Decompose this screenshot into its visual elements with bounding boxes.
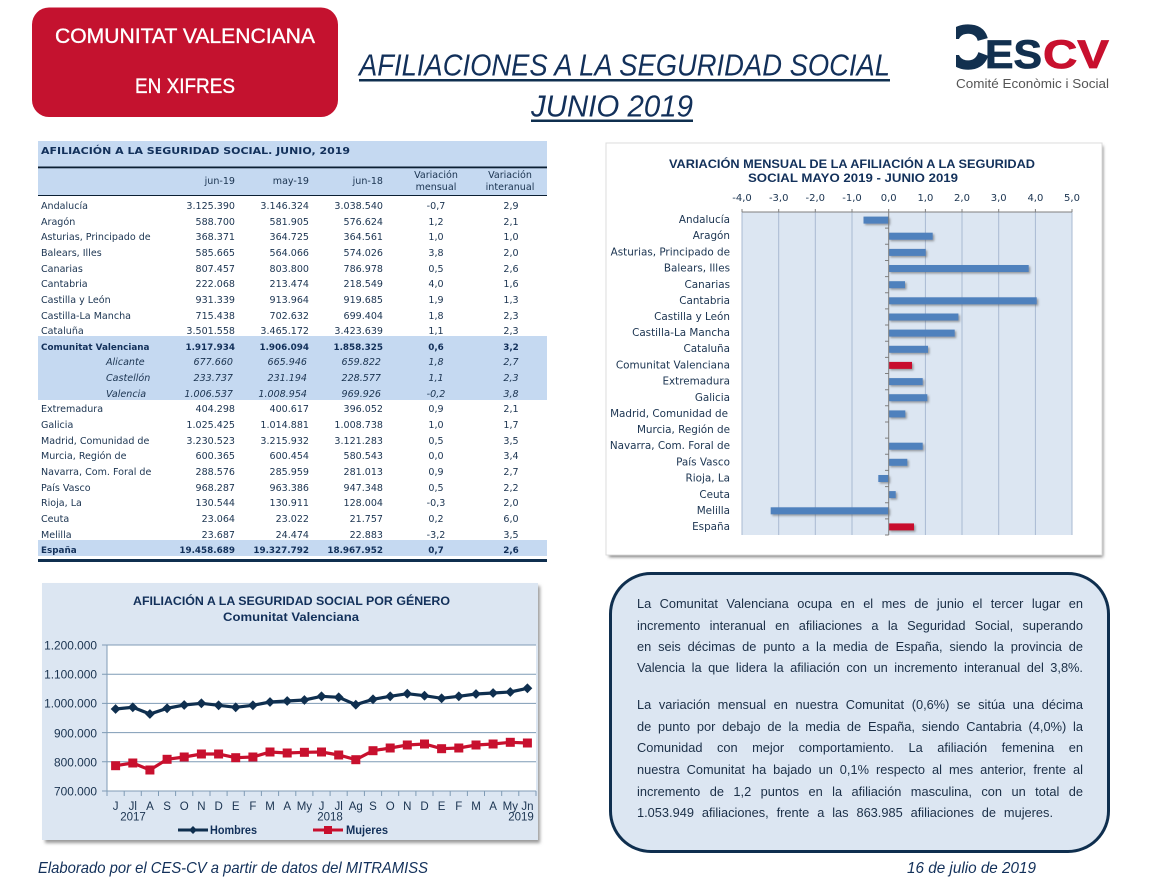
table rows: comunidades: 364.725 xyxy=(270,232,309,243)
line chart y axis values: 700.000 xyxy=(54,784,97,798)
line chart x axis labels: F xyxy=(249,801,256,813)
table rows: comunidades: 564.066 xyxy=(270,248,309,259)
line chart x axis labels: N xyxy=(197,801,206,813)
line chart x axis labels: A xyxy=(146,801,154,813)
table rows: comunidades: 1,3 xyxy=(503,295,519,306)
line chart x axis labels: My xyxy=(297,801,312,813)
table rows: comunidades: 1,0 xyxy=(503,232,519,243)
line chart x axis labels: N xyxy=(403,801,411,813)
table rows: comunidades: 574.026 xyxy=(344,248,383,259)
table rows: comunidades: Andalucía xyxy=(41,201,88,212)
table rows: comunidades: 3,8 xyxy=(428,248,444,259)
bar chart axis values: -4,0 xyxy=(732,193,752,204)
table rows: resto de comunidades: 22.883 xyxy=(350,530,383,541)
bar chart axis values: 0,0 xyxy=(881,193,897,204)
table row: Comunitat Valenciana: 1.858.325 xyxy=(333,343,383,353)
table rows: comunidades: 581.905 xyxy=(270,217,309,228)
table rows: provincias: 677.660 xyxy=(194,357,233,368)
table rows: resto de comunidades: 24.474 xyxy=(276,530,309,541)
table column headers: Variación xyxy=(488,170,532,181)
bar chart axis values: 1,0 xyxy=(917,193,933,204)
red header box: EN XIFRES xyxy=(135,75,235,98)
table rows: comunidades: 699.404 xyxy=(344,311,383,322)
table rows: comunidades: 585.665 xyxy=(196,248,235,259)
table rows: resto de comunidades: 963.386 xyxy=(270,483,309,494)
table row: España: 18.967.952 xyxy=(327,546,383,556)
table rows: comunidades: 0,5 xyxy=(428,264,444,275)
panel: bar chart variación mensual xyxy=(606,143,1103,557)
table rows: comunidades: 2,9 xyxy=(503,201,519,212)
table rows: comunidades: 222.068 xyxy=(196,279,235,290)
table rows: comunidades: Canarias xyxy=(41,264,83,275)
table rows: comunidades: 218.549 xyxy=(344,279,383,290)
line chart title: AFILIACIÓN A LA SEGURIDAD SOCIAL POR GÉNERO xyxy=(133,595,450,608)
table rows: resto de comunidades: 130.911 xyxy=(270,498,309,509)
table rows: resto de comunidades: 3.215.932 xyxy=(260,436,309,447)
table rows: comunidades: 913.964 xyxy=(270,295,309,306)
table rows: resto de comunidades: 3,5 xyxy=(503,436,519,447)
bar chart category labels: Melilla xyxy=(697,505,730,517)
table column headers: interanual xyxy=(486,182,534,193)
table rows: resto de comunidades: 6,0 xyxy=(503,514,519,525)
line chart y axis values: 800.000 xyxy=(54,756,97,770)
bar chart category labels: Castilla-La Mancha xyxy=(632,327,730,339)
main title: JUNIO 2019 xyxy=(530,88,693,124)
line chart y axis values: 1.000.000 xyxy=(44,696,97,710)
table rows: resto de comunidades xyxy=(41,404,519,541)
table rows: comunidades xyxy=(41,201,519,337)
table rows: comunidades: -0,7 xyxy=(427,201,445,212)
main title: AFILIACIONES A LA SEGURIDAD SOCIAL xyxy=(357,48,890,82)
line chart x axis labels: O xyxy=(180,801,189,813)
table rows: resto de comunidades: 396.052 xyxy=(344,404,383,415)
table rows: comunidades: Castilla-La Mancha xyxy=(41,311,131,322)
table rows: comunidades: 803.800 xyxy=(270,264,309,275)
table row: España: 19.327.792 xyxy=(253,546,309,556)
line chart title: Comunitat Valenciana xyxy=(223,612,360,624)
bar chart category labels: Aragón xyxy=(693,230,730,242)
table rows: comunidades: 3.146.324 xyxy=(260,201,309,212)
table rows: provincias: 2,3 xyxy=(503,373,519,384)
table rows: comunidades: 1,0 xyxy=(428,232,444,243)
table rows: comunidades: 786.978 xyxy=(344,264,383,275)
bar chart category labels: Comunitat Valenciana xyxy=(616,360,730,372)
table rows: comunidades: 715.438 xyxy=(196,311,235,322)
text panel: comentario: 1.053.949 afiliaciones, frente a las 863.985 afiliaciones de mujeres. xyxy=(637,805,1053,820)
line chart x axis labels: Jl xyxy=(335,801,343,813)
table rows: comunidades: 3.038.540 xyxy=(334,201,383,212)
table rows: comunidades: 1,1 xyxy=(428,326,444,337)
table rows: comunidades: Cantabria xyxy=(41,279,88,290)
bar chart axis values xyxy=(732,193,1080,204)
table rows: resto de comunidades: 3,5 xyxy=(503,530,519,541)
table rows: comunidades: 3.465.172 xyxy=(260,326,309,337)
table rows: comunidades: Balears, Illes xyxy=(41,248,102,259)
bar chart axis values: 4,0 xyxy=(1027,193,1043,204)
table rows: comunidades: Cataluña xyxy=(41,326,84,337)
bar chart title xyxy=(669,158,1035,185)
bar chart category labels: España xyxy=(692,521,730,533)
table: afiliación por comunidades xyxy=(38,141,547,562)
table rows: resto de comunidades: País Vasco xyxy=(41,483,91,494)
red header box xyxy=(32,8,338,117)
table rows: provincias: Castellón xyxy=(106,373,150,384)
table rows: resto de comunidades: 3,4 xyxy=(503,451,519,462)
main title xyxy=(357,48,890,124)
table rows: resto de comunidades: -3,2 xyxy=(427,530,445,541)
line chart x axis labels: Jn xyxy=(521,801,533,813)
table rows: comunidades: 588.700 xyxy=(196,217,235,228)
table rows: resto de comunidades: 23.064 xyxy=(202,514,235,525)
bar chart axis values: 3,0 xyxy=(991,193,1007,204)
table rows: resto de comunidades: 128.004 xyxy=(344,498,383,509)
table rows: comunidades: 2,3 xyxy=(503,326,519,337)
table rows: resto de comunidades: 0,9 xyxy=(428,404,444,415)
table rows: resto de comunidades: Rioja, La xyxy=(41,498,82,509)
table rows: resto de comunidades: 600.365 xyxy=(196,451,235,462)
table rows: resto de comunidades: Murcia, Región de xyxy=(41,451,127,462)
table rows: comunidades: 1,9 xyxy=(428,295,444,306)
table rows: provincias xyxy=(105,357,519,400)
line chart x axis labels: S xyxy=(369,801,377,813)
bar chart category labels: Extremadura xyxy=(662,376,730,388)
legend: Hombres xyxy=(178,825,257,837)
logo CES-CV: C xyxy=(945,14,988,81)
table rows: comunidades: 2,0 xyxy=(503,248,519,259)
line chart y axis values: 1.100.000 xyxy=(44,668,97,682)
table column headers: may-19 xyxy=(273,176,309,187)
table rows: resto de comunidades: Ceuta xyxy=(41,514,69,525)
bar chart category labels: Navarra, Com. Foral de xyxy=(610,440,730,452)
bars: Comunitat Valenciana y España xyxy=(889,362,914,530)
table rows: comunidades: 702.632 xyxy=(270,311,309,322)
table column headers: mensual xyxy=(416,182,456,193)
bar chart category labels xyxy=(610,214,730,533)
table rows: comunidades: 1,8 xyxy=(428,311,444,322)
table rows: resto de comunidades: 1.014.881 xyxy=(260,420,309,431)
line chart x axis labels: 2018 xyxy=(317,812,343,824)
table rows: resto de comunidades: 600.454 xyxy=(270,451,309,462)
table rows: resto de comunidades: 23.687 xyxy=(202,530,235,541)
table rows: comunidades: 807.457 xyxy=(196,264,235,275)
bar chart axis values: 2,0 xyxy=(954,193,970,204)
bars: comunidades xyxy=(771,217,1037,514)
footer date: 16 de julio de 2019 xyxy=(907,860,1036,877)
panel: line chart afiliación por género xyxy=(42,583,540,843)
bar chart plot area xyxy=(742,209,1072,535)
bar chart category labels: Canarias xyxy=(684,279,730,291)
table rows: comunidades: 3.125.390 xyxy=(186,201,235,212)
logo CES-CV: ES xyxy=(985,33,1042,77)
table column headers xyxy=(204,170,534,193)
line chart plot area xyxy=(102,645,536,796)
line chart x axis labels xyxy=(113,801,534,824)
logo CES-CV: Comité Econòmic i Social xyxy=(956,76,1109,91)
bar chart category labels: Cataluña xyxy=(684,343,730,355)
table rows: comunidades: 3.423.639 xyxy=(334,326,383,337)
bar chart title: SOCIAL MAYO 2019 - JUNIO 2019 xyxy=(748,173,958,185)
line chart x axis labels: O xyxy=(386,801,395,813)
table rows: resto de comunidades: 0,5 xyxy=(428,483,444,494)
line chart y axis values xyxy=(44,638,97,798)
table rows: resto de comunidades: 400.617 xyxy=(270,404,309,415)
line chart x axis labels: J xyxy=(319,801,324,813)
table row: Comunitat Valenciana xyxy=(41,343,519,353)
table rows: resto de comunidades: 21.757 xyxy=(350,514,383,525)
table rows: comunidades: Aragón xyxy=(41,217,75,228)
table rows: resto de comunidades: Madrid, Comunidad de xyxy=(41,436,149,447)
bar chart category labels: Cantabria xyxy=(679,295,730,307)
table rows: comunidades: 213.474 xyxy=(270,279,309,290)
table rows: resto de comunidades: 3.121.283 xyxy=(334,436,383,447)
line chart x axis labels: F xyxy=(455,801,462,813)
line chart x axis labels: E xyxy=(232,801,240,813)
table row: España: España xyxy=(41,546,77,556)
table rows: provincias: 2,7 xyxy=(503,357,519,368)
table rows: resto de comunidades: Extremadura xyxy=(41,404,103,415)
text panel: comentario: incremento interanual en afiliaciones a la Seguridad Social, superando xyxy=(637,618,1083,633)
line chart y axis values: 1.200.000 xyxy=(44,638,97,652)
table rows: comunidades: 368.371 xyxy=(196,232,235,243)
line chart y axis values: 900.000 xyxy=(54,726,97,740)
line chart x axis labels: Ag xyxy=(349,801,363,813)
table rows: provincias: Alicante xyxy=(105,357,145,368)
bar chart category labels: Ceuta xyxy=(699,489,730,501)
table rows: resto de comunidades: Galicia xyxy=(41,420,73,431)
table row: España: 19.458.689 xyxy=(179,546,235,556)
table rows: provincias: 659.822 xyxy=(342,357,381,368)
line chart x axis labels: M xyxy=(265,801,275,813)
table rows: comunidades: 1,6 xyxy=(503,279,519,290)
table rows: comunidades: 2,6 xyxy=(503,264,519,275)
text panel: comentario: Comunidad con mejor comportamiento. La afiliación femenina en xyxy=(637,740,1083,755)
line: Hombres xyxy=(116,688,527,714)
text panel: comentario: La variación mensual en nuestra Comunitat (0,6%) se sitúa una décima xyxy=(637,697,1083,712)
table rows: resto de comunidades: 0,0 xyxy=(428,451,444,462)
table rows: resto de comunidades: 285.959 xyxy=(270,467,309,478)
bar chart category labels: Galicia xyxy=(695,392,730,404)
table rows: comunidades: 2,1 xyxy=(503,217,519,228)
table rows: comunidades: 1,2 xyxy=(428,217,444,228)
table rows: provincias: 1.008.954 xyxy=(258,389,307,400)
line chart x axis labels: J xyxy=(113,801,118,813)
table rows: resto de comunidades: 23.022 xyxy=(276,514,309,525)
table rows: resto de comunidades: Navarra, Com. Foral de xyxy=(41,467,151,478)
text panel: comentario: Valencia la que lidera la afiliación con un incremento interanual del 3,8%. xyxy=(637,660,1083,675)
bar chart axis values: 5,0 xyxy=(1064,193,1080,204)
line chart x axis labels: S xyxy=(163,801,171,813)
bar chart category labels: Asturias, Principado de xyxy=(611,246,730,258)
table rows: comunidades: 4,0 xyxy=(428,279,444,290)
bar chart category labels: País Vasco xyxy=(676,456,730,468)
bar chart category labels: Madrid, Comunidad de xyxy=(610,408,728,420)
table rows: resto de comunidades: 1.025.425 xyxy=(186,420,235,431)
line chart x axis labels: D xyxy=(420,801,429,813)
table rows: provincias: 1,8 xyxy=(428,357,444,368)
bar chart category labels: Murcia, Región de xyxy=(637,424,730,436)
table rows: resto de comunidades: 1,0 xyxy=(428,420,444,431)
table rows: provincias: 1,1 xyxy=(428,373,444,384)
table rows: provincias: 1.006.537 xyxy=(184,389,233,400)
legend: Mujeres xyxy=(313,825,388,837)
table rows: comunidades: Asturias, Principado de xyxy=(41,232,151,243)
table rows: provincias: Valencia xyxy=(106,389,146,400)
table rows: resto de comunidades: 1.008.738 xyxy=(334,420,383,431)
line: Mujeres xyxy=(116,742,527,770)
bar chart axis values: -3,0 xyxy=(769,193,788,204)
bar chart axis values: -1,0 xyxy=(842,193,862,204)
line chart x axis labels: My xyxy=(503,801,518,813)
table rows: resto de comunidades: 2,1 xyxy=(503,404,519,415)
table rows: comunidades: Castilla y León xyxy=(41,295,111,306)
bar chart title: VARIACIÓN MENSUAL DE LA AFILIACIÓN A LA SEGURIDAD xyxy=(669,158,1035,171)
table rows: provincias: 231.194 xyxy=(268,373,307,384)
table rows: provincias: 969.926 xyxy=(342,389,381,400)
table rows: resto de comunidades: -0,3 xyxy=(427,498,445,509)
table rows: resto de comunidades: 130.544 xyxy=(196,498,235,509)
table rows: provincias: 228.577 xyxy=(342,373,381,384)
line chart x axis labels: 2019 xyxy=(508,812,534,824)
text panel: comentario: de punto por debajo de la media de España, siendo Cantabria (4,0%) la xyxy=(637,719,1083,734)
table rows: resto de comunidades: 968.287 xyxy=(196,483,235,494)
bar chart category labels: Balears, Illes xyxy=(664,262,730,274)
table column headers: Variación xyxy=(414,170,458,181)
table rows: resto de comunidades: 0,2 xyxy=(428,514,444,525)
table row: España: 2,6 xyxy=(503,546,519,556)
table rows: comunidades: 919.685 xyxy=(344,295,383,306)
text panel: comentario xyxy=(609,572,1110,853)
table rows: resto de comunidades: 404.298 xyxy=(196,404,235,415)
text panel: comentario: nuestra Comunitat ha bajado un 0,1% respecto al mes anterior, frente al xyxy=(637,762,1083,777)
table rows: resto de comunidades: 0,9 xyxy=(428,467,444,478)
table row: España: 0,7 xyxy=(428,546,444,556)
table rows: provincias: 3,8 xyxy=(503,389,519,400)
table rows: comunidades: 576.624 xyxy=(344,217,383,228)
line chart x axis labels: E xyxy=(438,801,446,813)
table rows: resto de comunidades: 281.013 xyxy=(344,467,383,478)
text panel: comentario: en seis décimas de punto a la media de España, siendo la provincia de xyxy=(637,639,1083,654)
legend: Mujeres: Mujeres xyxy=(346,825,388,837)
table rows: provincias: 233.737 xyxy=(194,373,233,384)
table rows: resto de comunidades: 0,5 xyxy=(428,436,444,447)
table row: Comunitat Valenciana: Comunitat Valenciana xyxy=(41,343,150,353)
line chart x axis labels: 2017 xyxy=(120,812,146,824)
table rows: provincias: -0,2 xyxy=(427,389,445,400)
table row: España xyxy=(41,546,519,556)
footer source: Elaborado por el CES-CV a partir de datos del MITRAMISS xyxy=(38,860,428,877)
bar chart category labels: Castilla y León xyxy=(654,311,730,323)
table row: Comunitat Valenciana: 0,6 xyxy=(428,343,444,353)
line chart x axis labels: A xyxy=(283,801,291,813)
table column headers: jun-18 xyxy=(352,176,383,187)
table title: AFILIACIÓN A LA SEGURIDAD SOCIAL. JUNIO, 2019 xyxy=(41,145,350,157)
bar chart category labels: Rioja, La xyxy=(686,472,730,484)
red header box: COMUNITAT VALENCIANA xyxy=(55,25,315,48)
table rows: resto de comunidades: 3.230.523 xyxy=(186,436,235,447)
table rows: comunidades: 931.339 xyxy=(196,295,235,306)
table rows: resto de comunidades: 288.576 xyxy=(196,467,235,478)
table row: Comunitat Valenciana: 3,2 xyxy=(503,343,519,353)
table rows: comunidades: 2,3 xyxy=(503,311,519,322)
table rows: resto de comunidades: 2,7 xyxy=(503,467,519,478)
table rows: resto de comunidades: 1,7 xyxy=(503,420,519,431)
table rows: comunidades: 3.501.558 xyxy=(186,326,235,337)
table rows: resto de comunidades: 2,2 xyxy=(503,483,519,494)
table row: Comunitat Valenciana: 1.906.094 xyxy=(259,343,309,353)
table row: Comunitat Valenciana: 1.917.934 xyxy=(185,343,235,353)
bar chart axis values: -2,0 xyxy=(806,193,825,204)
logo CES-CV: CV xyxy=(1043,33,1109,77)
text panel: comentario: La Comunitat Valenciana ocupa en el mes de junio el tercer lugar en xyxy=(637,596,1083,611)
line chart x axis labels: A xyxy=(489,801,497,813)
table rows: resto de comunidades: 947.348 xyxy=(344,483,383,494)
text panel: comentario: incremento de 1,2 puntos en la afiliación masculina, con un total de xyxy=(637,784,1083,799)
logo CES-CV xyxy=(936,14,1109,91)
legend: Hombres: Hombres xyxy=(210,825,257,837)
table rows: provincias: 665.946 xyxy=(268,357,307,368)
line chart title xyxy=(133,595,450,624)
table rows: resto de comunidades: Melilla xyxy=(41,530,72,541)
table column headers: jun-19 xyxy=(204,176,235,187)
line chart x axis labels: D xyxy=(214,801,223,813)
table rows: resto de comunidades: 580.543 xyxy=(344,451,383,462)
line chart x axis labels: Jl xyxy=(129,801,137,813)
bar chart category labels: Andalucía xyxy=(679,214,730,226)
table rows: resto de comunidades: 2,0 xyxy=(503,498,519,509)
line chart x axis labels: M xyxy=(471,801,481,813)
table rows: comunidades: 364.561 xyxy=(344,232,383,243)
